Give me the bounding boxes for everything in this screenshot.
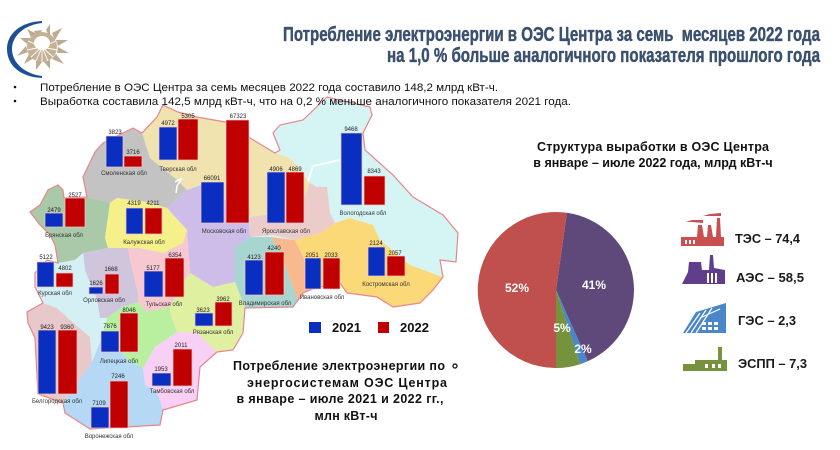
bars: Костромская обл: 2057 — [388, 251, 402, 257]
legend — [309, 320, 429, 335]
bars: Курская обл: 4802 — [58, 266, 72, 272]
pie chart: 2% — [574, 342, 592, 356]
bars: Ивановская обл: Ивановская обл — [300, 295, 345, 301]
bars: Костромская обл: 2124 — [369, 241, 383, 247]
bars: Липецкая обл: 7876 — [103, 324, 117, 330]
label: АЭС: АЭС – 58,5 — [736, 271, 804, 285]
bars: Белгородская обл: 9360 — [60, 325, 74, 331]
bars: Калужская обл — [123, 201, 165, 246]
bars: Курская обл: 5122 — [39, 255, 53, 261]
bars: Ярославская обл — [262, 167, 310, 235]
bars: Воронежская обл: Воронежская обл — [85, 434, 134, 440]
bars: Брянская обл — [45, 193, 85, 239]
bars: Тамбовская обл: 1953 — [154, 367, 168, 373]
bars: Костромская обл — [362, 241, 410, 288]
bars: Воронежская обл — [85, 374, 134, 440]
bars: Костромская обл: Костромская обл — [362, 282, 410, 288]
bars: Смоленская обл: 3823 — [108, 130, 122, 136]
pie chart — [478, 212, 634, 368]
small ring mark — [453, 364, 457, 368]
bars: Белгородская обл — [32, 325, 83, 405]
pie chart: 41% — [582, 278, 606, 292]
bars: Московская обл — [201, 114, 249, 235]
label: ЭСПП: ЭСПП – 7,3 — [738, 357, 807, 371]
logo — [7, 21, 69, 78]
bars: Тульская обл: 6354 — [168, 253, 182, 259]
bars: Воронежская обл: 7246 — [111, 374, 125, 380]
bars: Орловская обл — [83, 267, 125, 304]
bars: Смоленская обл — [101, 130, 147, 177]
bars: Московская обл: 66091 — [204, 176, 221, 182]
bars: Белгородская обл: 9423 — [40, 325, 54, 331]
bars: Тамбовская обл: 2011 — [175, 343, 188, 349]
pie chart: 52% — [505, 281, 529, 295]
bars: Вологодская обл — [340, 127, 387, 217]
bars: Ярославская обл: 4869 — [288, 167, 302, 173]
map caption — [233, 359, 448, 423]
bars: Тульская обл — [144, 253, 184, 308]
map caption: энергосистемам ОЭС Центра — [247, 376, 448, 390]
bars: Калужская обл: 4211 — [147, 201, 160, 207]
bullet text block: Потребление в ОЭС Центра за семь месяцев 2022 года составило 148,2 млрд кВт-ч. — [40, 82, 498, 94]
bars: Владимирская обл: 4240 — [267, 246, 281, 252]
bullet text block — [14, 82, 571, 108]
bars: Смоленская обл: Смоленская обл — [101, 171, 147, 177]
bars: Рязанская обл: 3962 — [216, 297, 230, 303]
bars: Тамбовская обл: Тамбовская обл — [150, 389, 195, 395]
bars: Вологодская обл: Вологодская обл — [340, 211, 387, 217]
bars: Тверская обл: Тверская обл — [159, 167, 197, 173]
icon: nuclear plant — [682, 255, 725, 284]
bars: Курская обл: Курская обл — [38, 291, 72, 297]
bars: Брянская обл: 2527 — [68, 193, 82, 199]
bars: Рязанская обл — [193, 297, 234, 336]
bars: Белгородская обл: Белгородская обл — [32, 399, 83, 405]
bullet text block: Выработка составила 142,5 млрд кВт-ч, что на 0,2 % меньше аналогичного показателя 2021 года. — [40, 96, 571, 108]
bars: Тверская обл: 5305 — [181, 114, 195, 120]
icon: industrial stations — [683, 347, 727, 371]
bars: Вологодская обл: 8343 — [367, 169, 381, 175]
icon: thermal plant — [681, 213, 724, 246]
bars: Тамбовская обл — [150, 343, 195, 395]
bars: Курская обл — [37, 255, 73, 297]
bars: Московская обл: Московская обл — [202, 229, 247, 235]
bars: Брянская обл: 2479 — [47, 208, 61, 214]
bars: Липецкая обл — [100, 308, 139, 365]
title — [283, 24, 821, 67]
bars: Калужская обл: 4319 — [127, 201, 141, 207]
bars: Воронежская обл: 7109 — [92, 401, 106, 407]
map caption: в январе – июле 2021 и 2022 гг., — [236, 392, 444, 406]
bars: Вологодская обл: 9468 — [344, 127, 358, 133]
map caption: млн кВт-ч — [314, 409, 378, 423]
bars: Орловская обл: Орловская обл — [83, 298, 125, 304]
bars: Ивановская обл — [300, 253, 345, 301]
label: ГЭС: ГЭС – 2,3 — [738, 314, 796, 328]
bars: Брянская обл: Брянская обл — [45, 233, 83, 239]
label: ТЭС: ТЭС – 74,4 — [735, 232, 800, 246]
pie chart: 5% — [553, 321, 571, 335]
bars: Тверская обл — [159, 114, 198, 173]
bars: Орловская обл: 1626 — [89, 281, 103, 287]
bars: Тульская обл: Тульская обл — [146, 302, 183, 308]
bars: Липецкая обл: 8046 — [122, 308, 136, 314]
bars: Владимирская обл — [239, 246, 292, 307]
bars: Рязанская обл: Рязанская обл — [193, 330, 234, 336]
legend: 2022 — [400, 320, 429, 335]
bars: Рязанская обл: 3623 — [196, 308, 210, 314]
bars: Ярославская обл: Ярославская обл — [262, 229, 310, 235]
bars: Владимирская обл: Владимирская обл — [239, 301, 292, 307]
bars: Тульская обл: 5177 — [146, 266, 160, 272]
map caption: Потребление электроэнергии по — [233, 359, 445, 373]
bars: Смоленская обл: 3716 — [126, 150, 140, 156]
bars: Владимирская обл: 4123 — [247, 255, 261, 261]
bars: Орловская обл: 1668 — [104, 267, 118, 273]
icon: hydro plant — [683, 303, 726, 333]
bars: Калужская обл: Калужская обл — [123, 240, 165, 246]
bars: Ивановская обл: 2033 — [324, 253, 338, 259]
bars: Московская обл: 67323 — [230, 114, 247, 120]
bars: Ярославская обл: 4906 — [269, 167, 283, 173]
legend: 2021 — [332, 320, 361, 335]
pie chart heading: Структура выработки в ОЭС Центра — [537, 140, 770, 154]
pie chart heading: в январе – июле 2022 года, млрд кВт-ч — [533, 156, 773, 170]
pie chart heading — [533, 140, 773, 170]
bars: Липецкая обл: Липецкая обл — [100, 359, 139, 365]
bars: Тверская обл: 4972 — [161, 121, 175, 127]
map of regions — [27, 97, 458, 429]
bars: Ивановская обл: 2051 — [305, 253, 319, 259]
